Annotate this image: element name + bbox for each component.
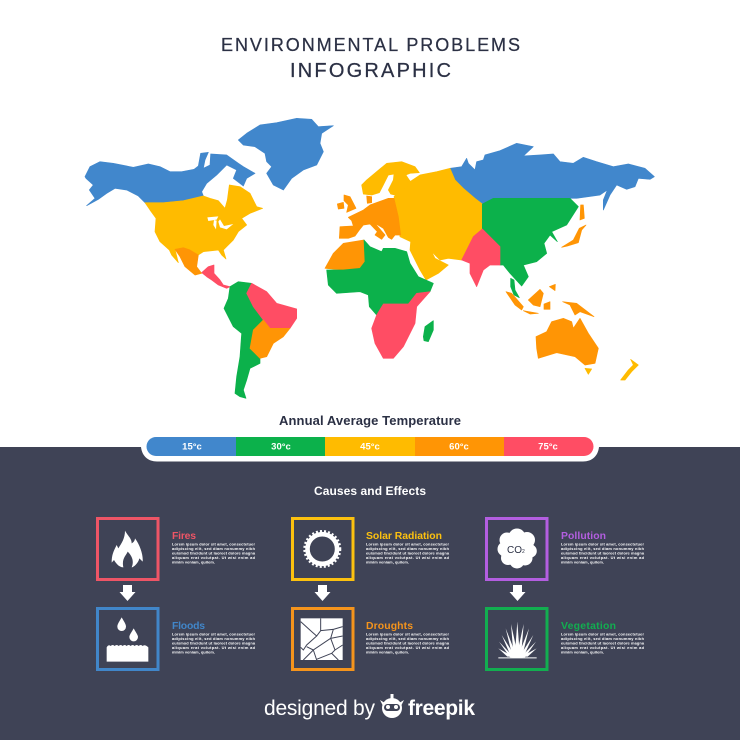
world map [85,118,654,398]
text: floods description: Lorem ipsum dolor sit amet, consectetuer [172,632,255,637]
map: the Americas [85,118,333,398]
text: pollution description: Lorem ipsum dolor sit amet, consectetuer [561,542,644,547]
footer: designed by freepik [264,694,475,720]
text: solar radiation description: euismod tincidunt ut laoreet dolore magna [366,550,450,556]
heading: annual average temperature: Annual Average Temperature [279,413,461,428]
map: Europe, Africa, Asia and Oceania [325,143,654,380]
Central Asia and Middle East [394,168,482,280]
card: fires [98,518,256,580]
footer: designed by freepik: designed by [264,697,376,720]
card: solar radiation: Solar Radiation [366,531,442,542]
title: INFOGRAPHIC [290,60,451,82]
Mexico [175,248,202,275]
text: solar radiation description: aliquam erat volutpat. Ut wisi enim ad [366,555,450,560]
icon: flame [112,531,143,567]
icon: cracked earth [301,618,343,660]
text: solar radiation description [366,542,450,564]
arrow: pollution to vegetation [510,585,526,601]
text: droughts description: euismod tincidunt ut laoreet dolore magna [366,640,450,646]
Russia [450,143,654,210]
footer: designed by freepik: freepik [408,697,475,720]
text: floods description: minim veniam, quilem. [172,649,215,654]
title: ENVIRONMENTAL PROBLEMS [221,35,520,55]
temperature legend: 75°c [538,442,558,452]
Great Lakes [207,216,233,229]
icon: sun ring [304,531,340,567]
dark lower panel [0,447,740,740]
Tasmania [585,368,592,374]
Greenland [238,118,333,190]
text: solar radiation description: minim veniam, quilem. [366,559,409,564]
Japan, Indonesia, New Guinea [506,205,594,317]
text: droughts description [366,632,450,654]
card: pollution: Pollution [561,531,606,542]
Malay peninsula [511,278,519,298]
text: fires description: Lorem ipsum dolor sit amet, consectetuer [172,542,255,547]
temperature legend: 30°c [271,442,291,452]
text: solar radiation description: adipiscing elit, sed diam nonummy nibh [366,546,450,551]
card: vegetation [486,608,645,670]
Brazil north [247,283,297,328]
card: floods [98,608,256,670]
arrow: solar radiation to droughts [314,585,330,601]
text: floods description [172,632,256,654]
New Zealand [621,359,638,380]
text: pollution description: euismod tincidunt ut laoreet dolore magna [561,550,645,556]
East Asia [482,198,578,286]
text: pollution description: minim veniam, quilem. [561,559,604,564]
heading: causes and effects: Causes and Effects [314,484,426,498]
temperature legend: 60°c [449,442,469,452]
Alaska and northern Canada [85,152,255,206]
text: pollution description: adipiscing elit, sed diam nonummy nibh [561,546,645,551]
card: droughts: Droughts [366,621,413,632]
Brazil south [250,320,290,358]
temperature legend: 15°c [182,442,202,452]
text: fires description: adipiscing elit, sed diam nonummy nibh [172,546,256,551]
Central Africa [327,240,433,315]
text: vegetation description [561,632,645,654]
text: vegetation description: euismod tincidunt ut laoreet dolore magna [561,640,645,646]
text: vegetation description: Lorem ipsum dolor sit amet, consectetuer [561,632,644,637]
text: floods description: euismod tincidunt ut laoreet dolore magna [172,640,256,646]
text: fires description [172,542,256,564]
Southern Africa [372,292,430,358]
India [462,229,500,287]
card: fires: Fires [172,531,196,542]
icon: freepik mascot [380,694,404,718]
text: droughts description: adipiscing elit, sed diam nonummy nibh [366,636,450,641]
text: fires description: aliquam erat volutpat. Ut wisi enim ad [172,555,256,560]
text: droughts description: minim veniam, quilem. [366,649,409,654]
North-west Africa [325,240,365,270]
card: droughts [292,608,450,670]
Madagascar [423,321,433,342]
Britain, Ireland, Denmark [337,195,372,212]
text: droughts description: Lorem ipsum dolor sit amet, consectetuer [366,632,449,637]
text: fires description: minim veniam, quilem. [172,559,215,564]
title [221,35,520,82]
text: pollution description [561,542,645,564]
card: vegetation: Vegetation [561,621,616,632]
Scandinavia [362,162,419,195]
temperature legend [141,437,599,462]
USA and southern Canada [145,185,263,263]
icon: water drops and sponge [107,617,148,662]
text: floods description: adipiscing elit, sed diam nonummy nibh [172,636,256,641]
arrow: fires to floods [120,585,136,601]
text: droughts description: aliquam erat volutpat. Ut wisi enim ad [366,645,450,650]
card: solar radiation [292,518,450,580]
icon: spiky plant [498,622,537,658]
icon: CO2 cloud: CO2 [507,545,525,556]
card: pollution [486,518,645,580]
card: floods: Floods [172,621,205,632]
Central America [202,265,230,288]
text: solar radiation description: Lorem ipsum dolor sit amet, consectetuer [366,542,449,547]
icon: CO2 cloud [498,528,537,568]
text: floods description: aliquam erat volutpat. Ut wisi enim ad [172,645,256,650]
text: vegetation description: minim veniam, quilem. [561,649,604,654]
South America west [224,282,263,398]
text: pollution description: aliquam erat volutpat. Ut wisi enim ad [561,555,645,560]
Western Europe [339,198,401,239]
Australia [536,318,598,365]
temperature legend: 45°c [360,442,380,452]
text: fires description: euismod tincidunt ut laoreet dolore magna [172,550,256,556]
text: vegetation description: adipiscing elit, sed diam nonummy nibh [561,636,645,641]
text: vegetation description: aliquam erat volutpat. Ut wisi enim ad [561,645,645,650]
